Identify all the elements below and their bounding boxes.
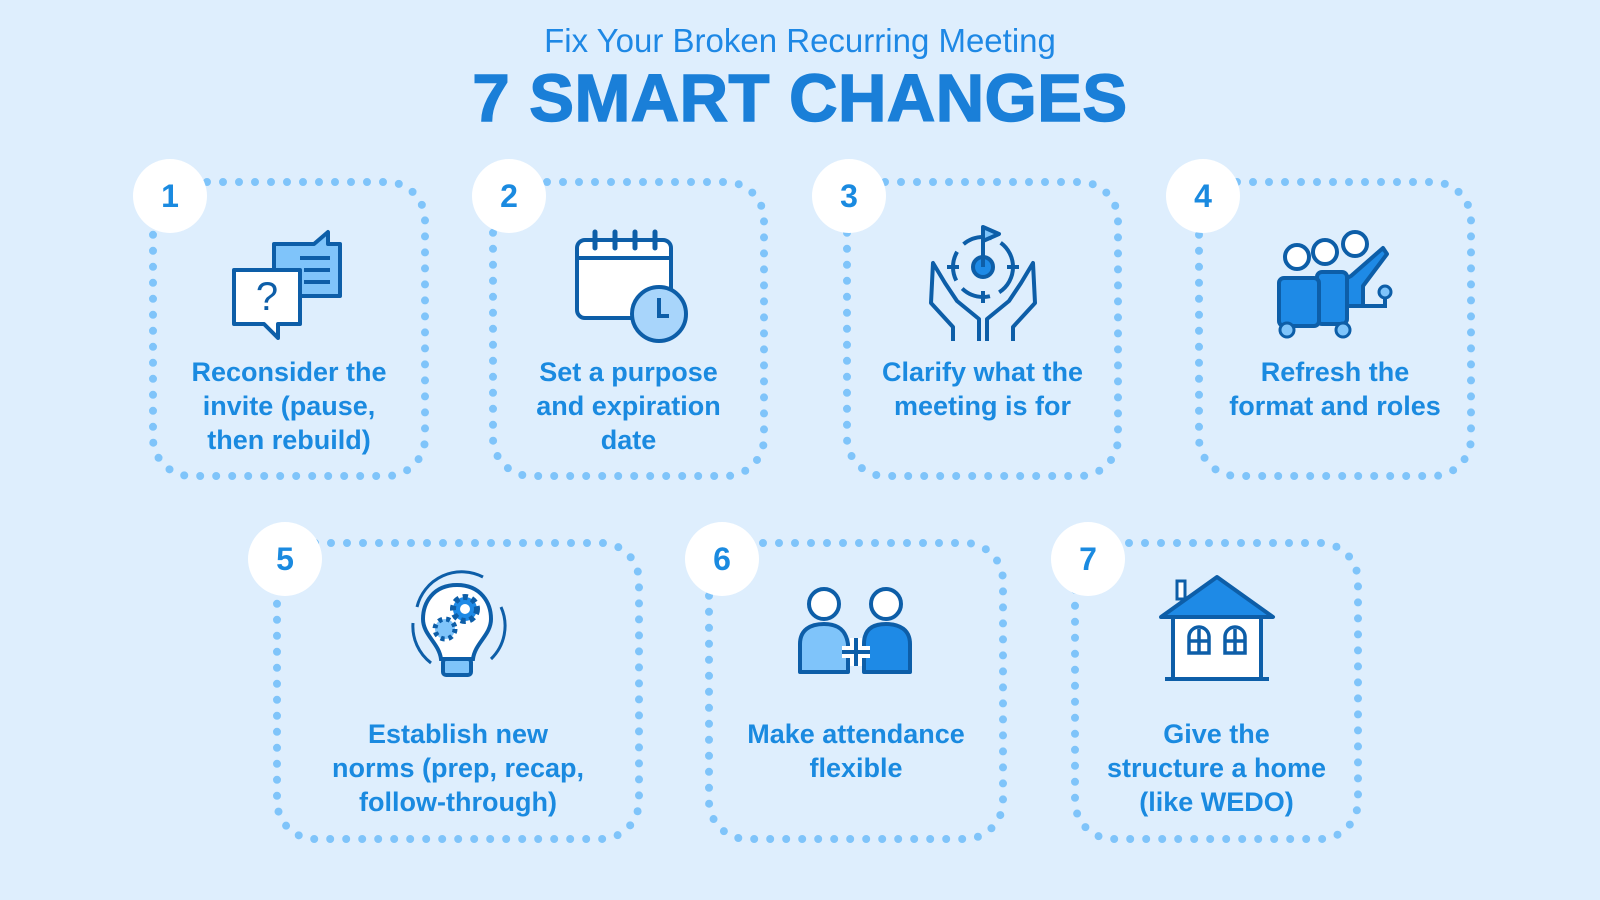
text 5: follow-through) [359,787,557,817]
text 6 [747,719,965,783]
badge 4 [1166,159,1240,233]
badge 7: 7 [1079,541,1097,577]
text 3 [882,357,1083,421]
text 5 [332,719,584,817]
text 6: flexible [809,753,903,783]
subtitle: Fix Your Broken Recurring Meeting [544,22,1056,59]
text 3: meeting is for [894,391,1071,421]
icon: lightbulb gears [411,570,507,677]
text 1: invite (pause, [203,391,375,421]
badge 3 [812,159,886,233]
text 7: Give the [1163,719,1270,749]
text 7: structure a home [1107,753,1326,783]
icon: people plus [798,587,912,674]
badge 1: 1 [161,178,179,214]
panel: card 5 [248,522,643,843]
badge 5 [248,522,322,596]
text 2: Set a purpose [539,357,718,387]
text 4 [1229,357,1441,421]
text 2: date [601,425,656,455]
panel: card 4 [1166,159,1475,480]
badge 6: 6 [713,541,731,577]
icon: chat bubbles [232,230,342,340]
badge 2: 2 [500,178,518,214]
text 1: Reconsider the [191,357,387,387]
badge 5: 5 [276,541,294,577]
icon: calendar clock [575,230,688,343]
text 4: format and roles [1229,391,1441,421]
main title: 7 SMART CHANGES [472,61,1128,136]
text 3: Clarify what the [882,357,1083,387]
badge 7 [1051,522,1125,596]
text 7: (like WEDO) [1139,787,1294,817]
panel: card 2 [472,159,768,480]
text 1 [191,357,387,455]
panel: card 1 [133,159,429,480]
text 4: Refresh the [1261,357,1409,387]
text 5: Establish new [368,719,548,749]
badge 2 [472,159,546,233]
icon: target in hands [929,225,1037,341]
panel: card 6 [685,522,1007,843]
icon: house [1159,575,1276,681]
badge 4: 4 [1194,178,1212,214]
panel: card 7 [1051,522,1362,843]
icon: chat bubbles: ? [256,275,278,319]
icon: team [1277,230,1392,338]
badge 3: 3 [840,178,858,214]
text 1: then rebuild) [207,425,371,455]
panel: card 3 [812,159,1122,480]
text 7 [1107,719,1326,817]
badge 6 [685,522,759,596]
text 6: Make attendance [747,719,965,749]
badge 1 [133,159,207,233]
text 2 [536,357,721,455]
text 2: and expiration [536,391,721,421]
text 5: norms (prep, recap, [332,753,584,783]
